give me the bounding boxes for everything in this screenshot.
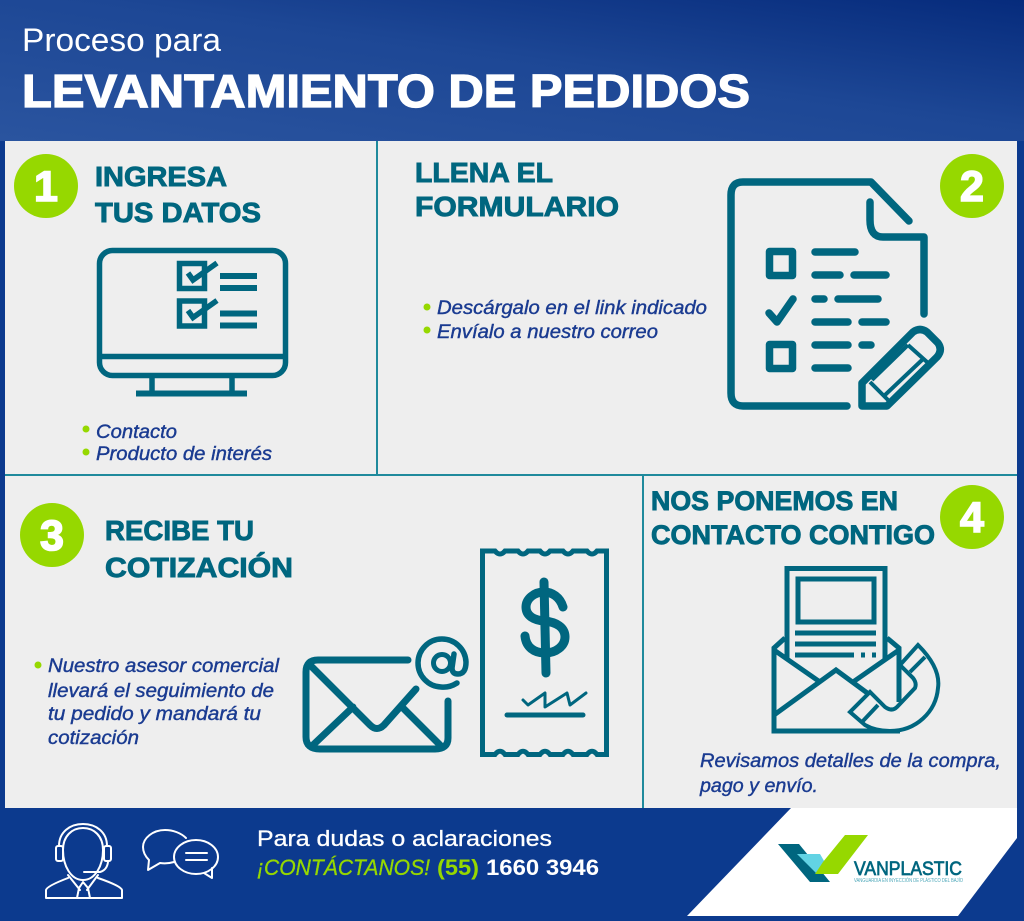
step 2 heading: FORMULARIO xyxy=(415,191,619,222)
header band xyxy=(0,0,1024,141)
step 1 heading xyxy=(95,161,261,228)
contact text: ¡CONTÁCTANOS! xyxy=(257,855,430,880)
contact text: (55) xyxy=(437,855,479,880)
step 3 heading: RECIBE TU xyxy=(105,515,254,546)
step 3 bullet text: tu pedido y mandará tu xyxy=(48,704,261,725)
contact text xyxy=(257,826,599,880)
logo tagline: VANGUARDIA EN INYECCIÓN DE PLÁSTICO DEL BAJÍO xyxy=(854,877,963,884)
step 1 bullet list xyxy=(82,422,273,465)
icon: computer monitor with checklist xyxy=(99,250,286,394)
panel: step 1 xyxy=(5,141,376,474)
logo panel: Vanplastic xyxy=(687,808,1017,916)
icon: form document with pencil xyxy=(731,182,940,406)
step 4 heading: NOS PONEMOS EN xyxy=(651,486,898,516)
contact text: 1660 3946 xyxy=(486,855,599,880)
step 4 description xyxy=(699,751,1001,797)
logo mark xyxy=(778,835,868,882)
step 4 number badge xyxy=(940,485,1004,549)
step 4 heading xyxy=(651,486,935,550)
header subtitle: Proceso para xyxy=(22,22,221,58)
step 2 bullet list: Envíalo a nuestro correo xyxy=(437,322,658,343)
step 4 description: pago y envío. xyxy=(699,776,818,797)
step 4 heading: CONTACTO CONTIGO xyxy=(651,520,935,550)
icon: chat bubbles xyxy=(143,830,218,878)
step 1 heading: TUS DATOS xyxy=(95,197,261,228)
step 3 bullet text xyxy=(34,656,280,749)
logo wordmark: VANPLASTIC xyxy=(854,859,962,880)
step 3 bullet text: Nuestro asesor comercial xyxy=(48,656,280,677)
step 3 heading: COTIZACIÓN xyxy=(105,552,293,583)
step 1 number badge xyxy=(14,154,78,218)
step 3 heading xyxy=(105,515,293,583)
panel: step 4 xyxy=(644,476,1017,808)
icon: envelope with at sign xyxy=(306,639,466,749)
step 4 description: Revisamos detalles de la compra, xyxy=(700,751,1001,772)
step 4 number badge: 4 xyxy=(960,494,984,542)
panel: step 3 xyxy=(5,476,642,808)
icon: open envelope with letter and telephone xyxy=(774,568,938,731)
step 2 number badge xyxy=(940,154,1004,218)
panel: step 2 xyxy=(378,141,1017,474)
step 3 number badge xyxy=(20,503,84,567)
step 3 bullet text: llevará el seguimiento de xyxy=(48,681,274,702)
title: LEVANTAMIENTO DE PEDIDOS xyxy=(22,65,750,117)
step 2 bullet list xyxy=(424,298,707,343)
step 1 bullet list: Contacto xyxy=(96,422,177,443)
step 3 number badge: 3 xyxy=(40,512,64,560)
step 3 bullet text: cotización xyxy=(48,728,139,749)
step 1 bullet list: Producto de interés xyxy=(96,444,273,465)
icon: receipt with dollar sign xyxy=(482,551,606,754)
step 2 bullet list: Descárgalo en el link indicado xyxy=(437,298,707,319)
icon: call center agent with headset xyxy=(46,824,122,898)
contact text: Para dudas o aclaraciones xyxy=(257,826,552,851)
step 2 heading: LLENA EL xyxy=(415,157,553,188)
step 2 number badge: 2 xyxy=(960,163,984,211)
step 1 heading: INGRESA xyxy=(95,161,227,192)
step 1 number badge: 1 xyxy=(34,163,58,211)
footer band xyxy=(0,808,1024,921)
step 2 heading xyxy=(415,157,619,222)
